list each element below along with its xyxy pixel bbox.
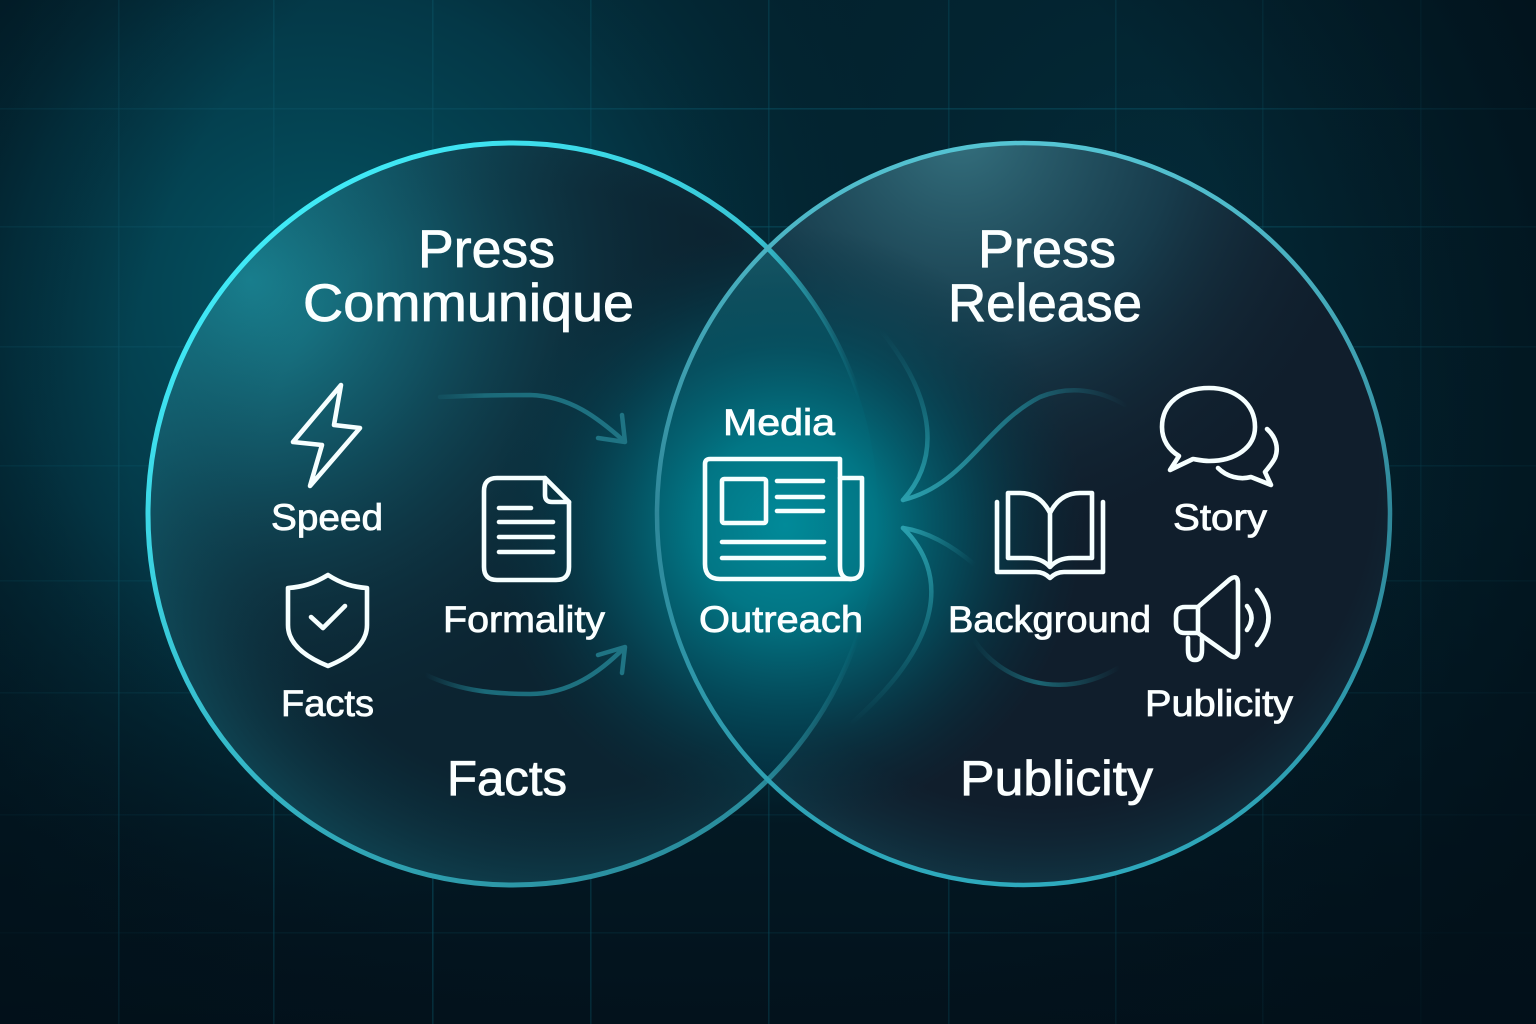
icon: open book <box>997 493 1103 578</box>
panel: overlap lens <box>540 252 1043 790</box>
label: formality: Formality <box>443 599 606 640</box>
icon: lightning bolt <box>293 385 360 486</box>
panel: press communique circle <box>148 143 878 885</box>
label: story: Story <box>1173 497 1268 538</box>
flowing connector curves: press release to center <box>853 332 1125 722</box>
heading: facts: Facts <box>447 752 567 806</box>
heading: press release <box>948 220 1142 333</box>
heading: press communique: Communique <box>303 274 634 333</box>
arrow: bottom left to center <box>420 647 625 694</box>
label: publicity: Publicity <box>1145 683 1294 724</box>
panel: press release circle <box>657 143 1390 885</box>
right circle outline <box>657 143 1390 885</box>
icon: shield with check <box>288 575 367 666</box>
label: speed: Speed <box>271 497 383 538</box>
left circle outline <box>148 143 878 885</box>
label: media: Media <box>723 402 835 443</box>
label: background: Background <box>948 599 1151 640</box>
icon: document <box>484 478 569 580</box>
label: facts: Facts <box>281 683 374 724</box>
heading: press release: Press <box>978 220 1116 279</box>
arrow: top left to center <box>440 395 625 442</box>
icon: megaphone <box>1176 577 1268 660</box>
heading: press communique: Press <box>418 220 555 279</box>
heading: press communique <box>303 220 634 333</box>
label: outreach: Outreach <box>699 599 863 640</box>
heading: publicity: Publicity <box>960 752 1154 806</box>
icon: speech bubbles <box>1162 388 1277 485</box>
icon: newspaper <box>705 459 862 579</box>
heading: press release: Release <box>948 274 1142 333</box>
